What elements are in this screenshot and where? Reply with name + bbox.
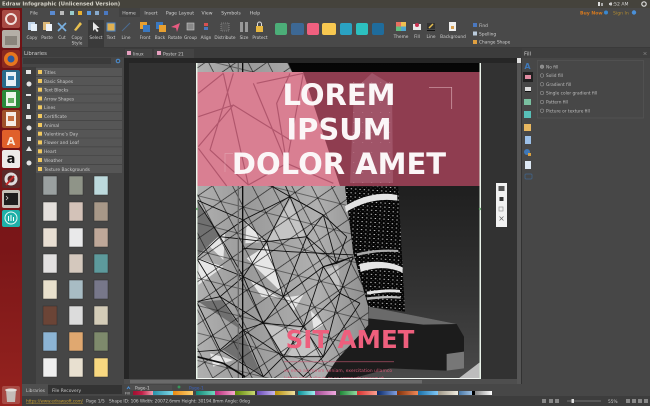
poster bbox=[196, 60, 481, 382]
title text: IPSUM bbox=[286, 112, 392, 146]
subtitle: SIT AMET bbox=[286, 325, 415, 354]
theme and fill tools: Fill bbox=[414, 34, 420, 40]
arrange tools: Align bbox=[201, 35, 212, 41]
library category list: Arrow Shapes bbox=[44, 96, 75, 102]
theme colour swatches bbox=[275, 23, 384, 35]
clipboard tools: Copy bbox=[72, 35, 83, 41]
library category list: Valentine's Day bbox=[44, 132, 78, 138]
document tabs: Poster 21 bbox=[163, 52, 184, 58]
document tabs bbox=[125, 49, 194, 58]
texture thumbnails bbox=[43, 176, 108, 377]
panel: libraries bbox=[22, 48, 124, 396]
fill options box: Gradient fill bbox=[546, 82, 571, 88]
launcher icon: trash bbox=[2, 386, 20, 404]
launcher icon: edraw bbox=[2, 210, 20, 227]
title bar bbox=[0, 0, 650, 8]
arrange tools: Rotate bbox=[168, 35, 182, 41]
launcher icon: ubuntu bbox=[2, 10, 20, 28]
buy now and sign in bbox=[580, 10, 636, 16]
theme and fill tools: Find bbox=[479, 23, 488, 29]
libraries bottom tabs: File Recovery bbox=[52, 388, 82, 394]
launcher icon: calc bbox=[2, 90, 20, 108]
ribbon toolbar bbox=[0, 8, 650, 48]
launcher icon: writer bbox=[2, 70, 20, 88]
title text bbox=[234, 83, 446, 174]
library category list: Animal bbox=[44, 123, 59, 129]
selection handles bbox=[196, 63, 481, 379]
library category list: Texture Backgrounds bbox=[43, 167, 91, 173]
arrange tools: Front bbox=[140, 35, 151, 41]
panel: fill bbox=[522, 48, 650, 396]
colour palette bbox=[133, 391, 492, 395]
fill side icons: A bbox=[524, 62, 531, 71]
page tabs: Fill bbox=[125, 392, 130, 396]
zoom controls: 55% bbox=[608, 399, 618, 405]
menu tabs bbox=[30, 8, 260, 17]
menu tabs: Help bbox=[250, 10, 260, 16]
title bar: Edraw Infographic (Unlicensed Version) bbox=[2, 2, 120, 8]
clipboard tools: Cut bbox=[58, 35, 66, 41]
zoom controls bbox=[542, 399, 648, 405]
canvas area bbox=[124, 48, 522, 384]
clipboard tools bbox=[27, 20, 131, 47]
document tabs: linux bbox=[133, 52, 144, 58]
theme and fill tools bbox=[393, 22, 511, 46]
fill options box: Pattern fill bbox=[546, 100, 568, 106]
arrange tools: Distribute bbox=[214, 35, 236, 41]
library category list: Certificate bbox=[44, 114, 67, 120]
fill options box: Solid fill bbox=[546, 73, 563, 79]
menu tabs: File bbox=[30, 10, 38, 16]
title bar: 2:52 AM bbox=[610, 2, 628, 8]
clipboard tools: Text bbox=[106, 35, 116, 41]
fill options box: Picture or texture fill bbox=[546, 108, 590, 114]
glass building bbox=[197, 60, 368, 380]
floating shape toolbar bbox=[496, 183, 507, 227]
library category list: Heart bbox=[44, 149, 56, 155]
launcher icon: amazon bbox=[2, 150, 20, 168]
title text: DOLOR AMET bbox=[232, 147, 446, 181]
title corner brackets bbox=[225, 87, 452, 172]
arrange tools: Size bbox=[240, 35, 249, 41]
clipboard tools: Style bbox=[72, 40, 83, 46]
poster photo bbox=[197, 60, 481, 382]
launcher icon: firefox bbox=[2, 50, 20, 68]
ruler bbox=[124, 58, 517, 63]
fill options box: No fill bbox=[546, 64, 558, 70]
status bar: https://www.edrawsoft.com/ bbox=[26, 398, 84, 404]
status bar: Page 1/5 bbox=[86, 398, 105, 404]
launcher icon: impress bbox=[2, 110, 20, 128]
fill side icons bbox=[523, 62, 533, 179]
menu tabs: Page Layout bbox=[166, 10, 194, 16]
body text: ex ensa ad minim veniam, exercitation ullamco bbox=[284, 368, 392, 374]
library category list: Lines bbox=[44, 105, 56, 111]
menu tabs: View bbox=[202, 10, 213, 16]
pink title band bbox=[197, 72, 480, 186]
tower bbox=[345, 187, 405, 312]
clipboard tools: Line bbox=[122, 35, 131, 41]
menu tabs: Symbols bbox=[221, 10, 241, 16]
fill options box bbox=[538, 60, 644, 118]
clipboard tools: Copy bbox=[27, 35, 38, 41]
library category list: Titles bbox=[43, 70, 56, 76]
status bar: Shape ID: 106 Width: 20072.6mm Height: 30194.8mm Angle: 0deg bbox=[109, 398, 250, 404]
theme and fill tools: Change Shape bbox=[479, 40, 511, 46]
buy now and sign in: Buy Now bbox=[580, 10, 603, 16]
fill options box: Single color gradient fill bbox=[546, 91, 597, 97]
body text bbox=[284, 368, 392, 378]
library category icons bbox=[26, 70, 32, 166]
launcher icon: terminal bbox=[2, 190, 20, 208]
page tabs: Page-1 bbox=[135, 386, 150, 392]
libraries bottom tabs bbox=[22, 384, 122, 396]
canvas scrollbars bbox=[124, 58, 521, 384]
body text: laboris nisi ut aliquip ex ea commodo consequat bbox=[284, 376, 384, 382]
menu tabs: Insert bbox=[144, 10, 158, 16]
title text: LOREM bbox=[282, 78, 396, 112]
arrange tools: Group bbox=[184, 35, 197, 41]
panel: fill: Fill bbox=[524, 52, 531, 58]
theme and fill tools: Theme bbox=[393, 34, 409, 40]
buy now and sign in: Sign In bbox=[613, 10, 629, 16]
library category list: Weather bbox=[44, 158, 63, 164]
library category list bbox=[36, 68, 122, 173]
clipboard tools: Paste bbox=[41, 35, 53, 41]
library category list: Text Blocks bbox=[43, 88, 69, 94]
lattice lines bbox=[197, 60, 360, 380]
library category list: Flower and Leaf bbox=[44, 140, 79, 146]
panel: libraries: Libraries bbox=[24, 51, 47, 57]
arrange tools bbox=[140, 22, 268, 41]
arrange tools: Back bbox=[155, 35, 166, 41]
page tabs: Page-1 bbox=[189, 386, 204, 392]
launcher icon: software centre bbox=[2, 130, 20, 148]
launcher icon: software centre: A bbox=[7, 135, 16, 148]
launcher icon: files bbox=[2, 30, 20, 48]
ubuntu launcher bbox=[0, 8, 22, 406]
page tabs bbox=[124, 384, 522, 396]
launcher icon: settings bbox=[2, 170, 20, 188]
theme and fill tools: Line bbox=[427, 34, 436, 40]
library category list: Basic Shapes bbox=[44, 79, 74, 85]
clipboard tools: Select bbox=[89, 35, 103, 41]
status bar bbox=[22, 396, 650, 406]
low roof structure bbox=[323, 307, 464, 380]
theme and fill tools: Spelling bbox=[479, 32, 496, 38]
theme and fill tools: Background bbox=[440, 34, 466, 40]
libraries bottom tabs: Libraries bbox=[26, 388, 46, 394]
arrange tools: Protect bbox=[252, 35, 268, 41]
subtitle rule bbox=[284, 362, 394, 363]
menu tabs: Home bbox=[122, 10, 136, 16]
launcher icon: amazon: a bbox=[7, 152, 15, 167]
